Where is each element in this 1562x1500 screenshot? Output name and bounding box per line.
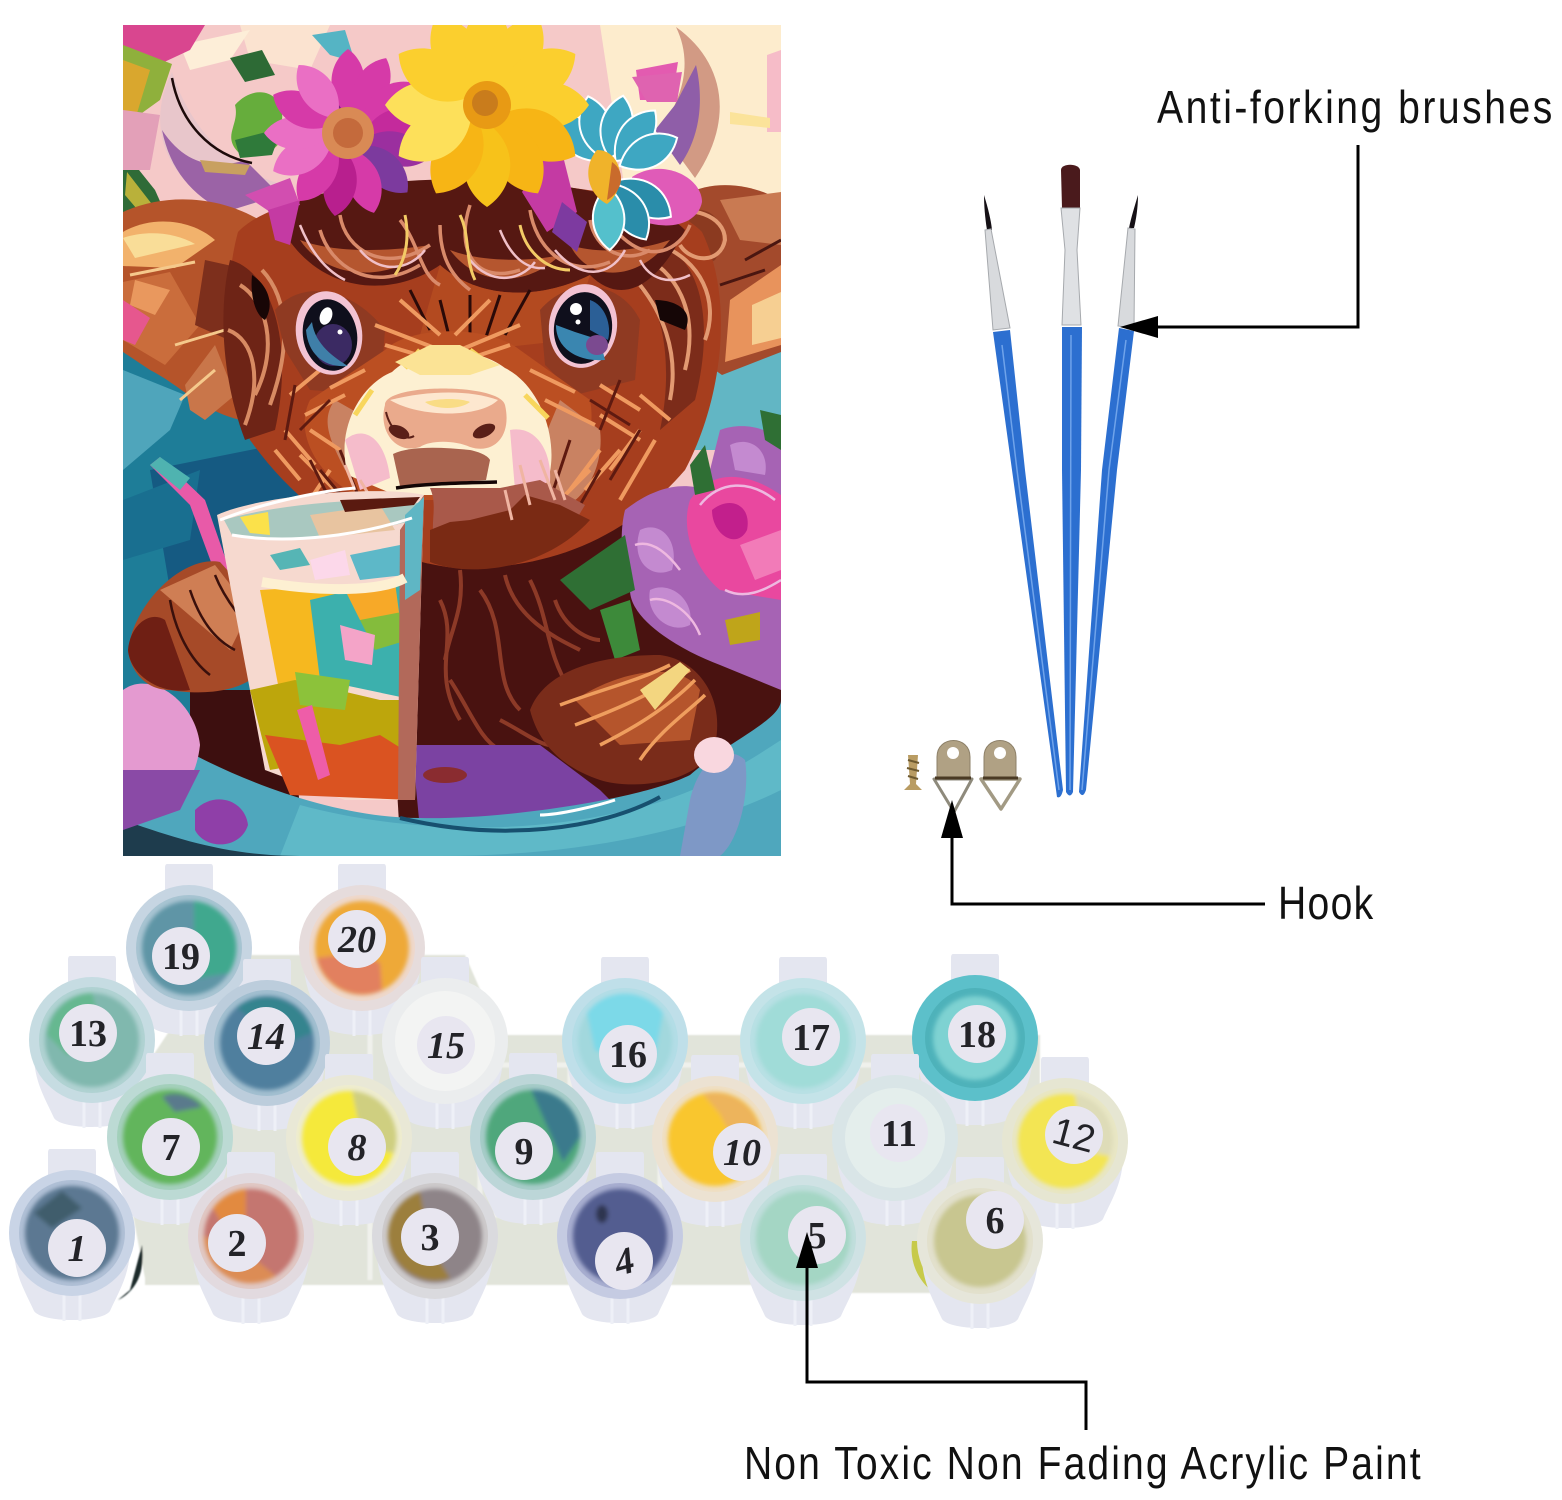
paint pot 10: 10: [723, 1132, 761, 1174]
paint pot 4: [557, 1152, 683, 1324]
arrow: paint: [796, 1232, 1086, 1430]
purple cloth: [416, 745, 609, 818]
curly side hair right: [640, 240, 704, 430]
forehead hair locks: [275, 179, 685, 293]
paint pot 11: 11: [881, 1113, 917, 1155]
paint pot 20: 20: [337, 919, 376, 961]
paint pot 14: [204, 959, 330, 1131]
paint pot 20: [299, 864, 425, 1036]
nose: [383, 388, 507, 449]
paint pot 5: 5: [808, 1215, 826, 1257]
glass drink: [217, 488, 424, 800]
green leaf: [231, 92, 283, 155]
paint pot 7: [107, 1053, 233, 1225]
paint pot 1: [9, 1149, 135, 1321]
label: Non Toxic Non Fading Acrylic Paint: Non Toxic Non Fading Acrylic Paint: [744, 1438, 1421, 1490]
mouth and chin: [393, 448, 490, 486]
teal backdrop right: [694, 352, 781, 450]
magenta flower: [264, 49, 434, 219]
purple and pink flowers right: [560, 410, 781, 690]
left eye: [296, 291, 362, 375]
brush: right round brush: [1079, 195, 1138, 795]
paint pot 2: 2: [228, 1223, 246, 1265]
label: Anti-forking brushes: Anti-forking brushes: [1157, 82, 1552, 134]
paint pot 19: [126, 864, 252, 1036]
face fur: [305, 331, 592, 501]
right eye: [548, 284, 618, 368]
paint pot 13: 13: [69, 1013, 107, 1055]
paint pot 8: 8: [348, 1127, 366, 1169]
eye surrounds: [275, 291, 385, 395]
paint pot 17: [740, 957, 866, 1129]
arrow: hook: [941, 800, 1265, 904]
paint pot 7: 7: [162, 1127, 180, 1169]
paint pot 9: [470, 1053, 596, 1225]
paint pot 16: [562, 957, 688, 1129]
straw: [150, 457, 228, 570]
paint pot 15: [382, 957, 508, 1129]
paint pot 13: [29, 956, 155, 1128]
background cream right: [600, 25, 781, 194]
small magenta buds: [245, 178, 300, 212]
brush: middle flat brush: [1061, 165, 1082, 796]
paint pot 3: [372, 1152, 498, 1324]
label: Hook: Hook: [1278, 878, 1374, 930]
paint pot 8: [286, 1054, 412, 1226]
paint pot 12: [1002, 1057, 1128, 1229]
paint pot 16: 16: [609, 1034, 647, 1076]
paint pot 18: 18: [958, 1014, 996, 1056]
head base: [228, 182, 721, 568]
paint pot 18: [912, 954, 1038, 1126]
body dark fur: [398, 524, 781, 818]
right ear: [688, 185, 781, 375]
paint pot 3: 3: [420, 1217, 440, 1259]
paint pot 17: 17: [792, 1017, 830, 1059]
paint pot 15: 15: [427, 1025, 465, 1067]
paint pot 6: 6: [986, 1200, 1004, 1242]
left ear: [123, 199, 256, 420]
paint pot 6: [912, 1157, 1043, 1329]
left paw: [128, 561, 248, 692]
yellow flower: [385, 25, 589, 207]
paint pot 1: 1: [68, 1228, 86, 1270]
teal backdrop left: [123, 352, 256, 715]
arrow: brushes: [1120, 145, 1358, 338]
paint pot 2: [188, 1152, 314, 1324]
paint pot 14: 14: [247, 1016, 285, 1058]
brush: left round brush: [984, 195, 1063, 797]
paint pot 5: [740, 1154, 866, 1326]
paint pot 10: [652, 1055, 778, 1227]
paint pot 19: 19: [162, 936, 200, 978]
icon: hook one: [934, 740, 972, 812]
paint pot 4: 4: [609, 1239, 639, 1285]
tray of paint pots: [118, 955, 1040, 1300]
icon: hook two: [981, 740, 1020, 809]
muzzle cream: [344, 351, 551, 495]
left horn: [160, 72, 276, 185]
painting: highland calf with flower crown: [123, 3, 781, 856]
paint pot 9: 9: [514, 1131, 534, 1173]
bottom teal band: [123, 700, 781, 856]
background magenta and green corner: [123, 25, 205, 64]
blue flower with pink buds: [522, 72, 702, 252]
right paw: [530, 655, 717, 784]
bottom left pink flower: [123, 684, 200, 770]
paint pot 12: 12: [1048, 1110, 1100, 1162]
right horn: [674, 27, 720, 178]
curly side hair left: [223, 260, 282, 440]
icon: screw: [904, 755, 922, 790]
paint pot 11: [832, 1054, 958, 1226]
